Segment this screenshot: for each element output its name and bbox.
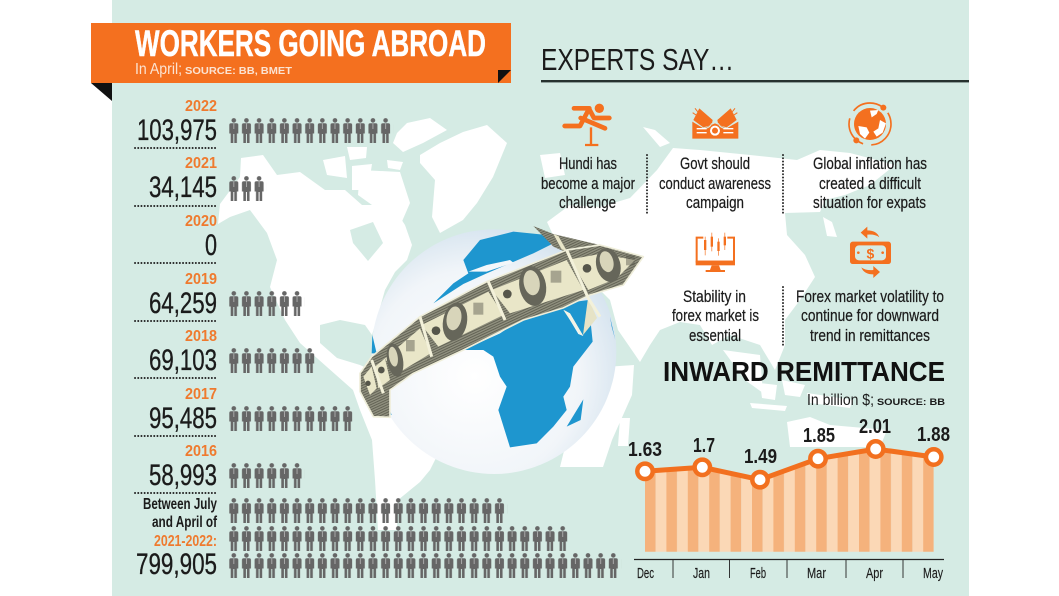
row 2022: [135, 98, 393, 148]
text: situation for expats: [813, 194, 926, 212]
row 2020: 0: [205, 229, 217, 262]
row 2021: 2021: [185, 155, 217, 172]
row 2018: [135, 328, 318, 378]
text: challenge: [559, 194, 616, 212]
inward remittance heading: [663, 356, 945, 409]
axis: Dec: [637, 565, 654, 582]
axis: May: [923, 565, 943, 582]
row 2021: [135, 155, 267, 206]
icon: hurdler: [565, 104, 609, 145]
expert 3: inflation: [813, 103, 927, 212]
icon: megaphones: [692, 108, 738, 139]
upper fold: [533, 226, 600, 253]
expert 5: forex volatility: [796, 227, 944, 345]
line: [645, 449, 934, 480]
values: 1.63: [628, 438, 662, 461]
lower fold: [583, 298, 597, 335]
row 2018: 69,103: [149, 344, 217, 377]
header banner: [91, 23, 511, 101]
portraits: [440, 301, 470, 343]
row 2016: 58,993: [149, 459, 217, 492]
text: [541, 155, 635, 212]
axis: Mar: [807, 565, 826, 582]
inward remittance heading: SOURCE: BB: [877, 397, 945, 408]
row 2018: 2018: [185, 328, 217, 345]
text: forex market is: [672, 307, 759, 325]
row 2017: [135, 386, 356, 436]
row 2016: 2016: [185, 443, 217, 460]
row 2019: 64,259: [149, 287, 217, 320]
values: [628, 415, 950, 468]
experts heading: EXPERTS SAY…: [541, 42, 734, 77]
expert 2: awareness: [659, 108, 771, 212]
text: trend in remittances: [810, 327, 930, 345]
row total: 2021-2022:: [154, 533, 217, 550]
eurasia: [547, 148, 895, 370]
text: essential: [689, 327, 741, 345]
icon: monitor chart: [696, 233, 735, 272]
row 2022: 2022: [185, 98, 217, 115]
icon: dollar exchange: [850, 227, 891, 278]
text: campaign: [686, 194, 744, 212]
globe: [360, 226, 643, 474]
africa, madagascar, asia pacific islands, australia: [560, 350, 887, 467]
values: 1.85: [803, 424, 835, 447]
expert 1: hundi: [541, 104, 635, 212]
text: conduct awareness: [659, 175, 771, 193]
markers: [637, 441, 941, 487]
north and south america: [218, 155, 450, 530]
subtitle: SOURCE: BB, BMET: [185, 66, 292, 77]
europe on globe: [433, 232, 553, 303]
subtitle: [135, 61, 292, 78]
row total: 799,905: [136, 548, 217, 581]
inward remittance heading: In billion $;: [807, 392, 874, 409]
greenland: [420, 125, 507, 233]
text: continue for downward: [801, 307, 939, 325]
ribbon body: [360, 245, 643, 417]
axis: Apr: [866, 565, 883, 582]
cream bill faces: [363, 254, 635, 395]
seals and windows: [365, 255, 635, 386]
text: Hundi has: [559, 155, 617, 173]
icon: globe cycle: [849, 103, 891, 145]
money arrow: [360, 226, 643, 417]
subtitle: In April;: [135, 61, 182, 78]
text: [659, 155, 771, 212]
values: 2.01: [859, 415, 891, 438]
text: Govt should: [680, 155, 750, 173]
row total: Between July: [143, 496, 217, 513]
row 2017: 95,485: [149, 402, 217, 435]
values: 1.49: [744, 445, 777, 468]
line chart: [628, 415, 950, 582]
values: 1.88: [917, 423, 950, 446]
values: 1.7: [693, 434, 715, 457]
row 2020: 2020: [185, 213, 217, 230]
text: Forex market volatility to: [796, 288, 944, 306]
text: created a difficult: [819, 175, 921, 193]
row total: [136, 496, 621, 581]
text: become a major: [541, 175, 635, 193]
row 2021: 34,145: [149, 171, 217, 204]
expert 4: stability: [672, 233, 759, 345]
africa on globe: [463, 300, 593, 447]
row total: and April of: [152, 514, 217, 531]
row 2022: 103,975: [137, 114, 217, 147]
scandinavia, islands, japan: [540, 127, 837, 237]
icon: dollar exchange: $: [866, 245, 874, 261]
row 2017: 2017: [185, 386, 217, 403]
text: Global inflation has: [813, 155, 927, 173]
text: [672, 288, 759, 345]
axis: Feb: [750, 565, 766, 582]
text: Stability in: [683, 288, 746, 306]
arctic islands: [323, 118, 447, 226]
title: WORKERS GOING ABROAD: [135, 23, 486, 64]
row 2020: [135, 213, 218, 263]
bill stripes: [372, 250, 600, 393]
row 2019: [135, 271, 305, 321]
text: [813, 155, 927, 212]
inward remittance heading: INWARD REMITTANCE: [663, 356, 945, 387]
row 2016: [135, 443, 305, 493]
axis: Jan: [693, 565, 710, 582]
row 2019: 2019: [185, 271, 217, 288]
workers list: [135, 98, 621, 581]
world map: [218, 118, 895, 530]
area: [645, 449, 934, 552]
text: [796, 288, 944, 345]
axis: [634, 559, 944, 582]
